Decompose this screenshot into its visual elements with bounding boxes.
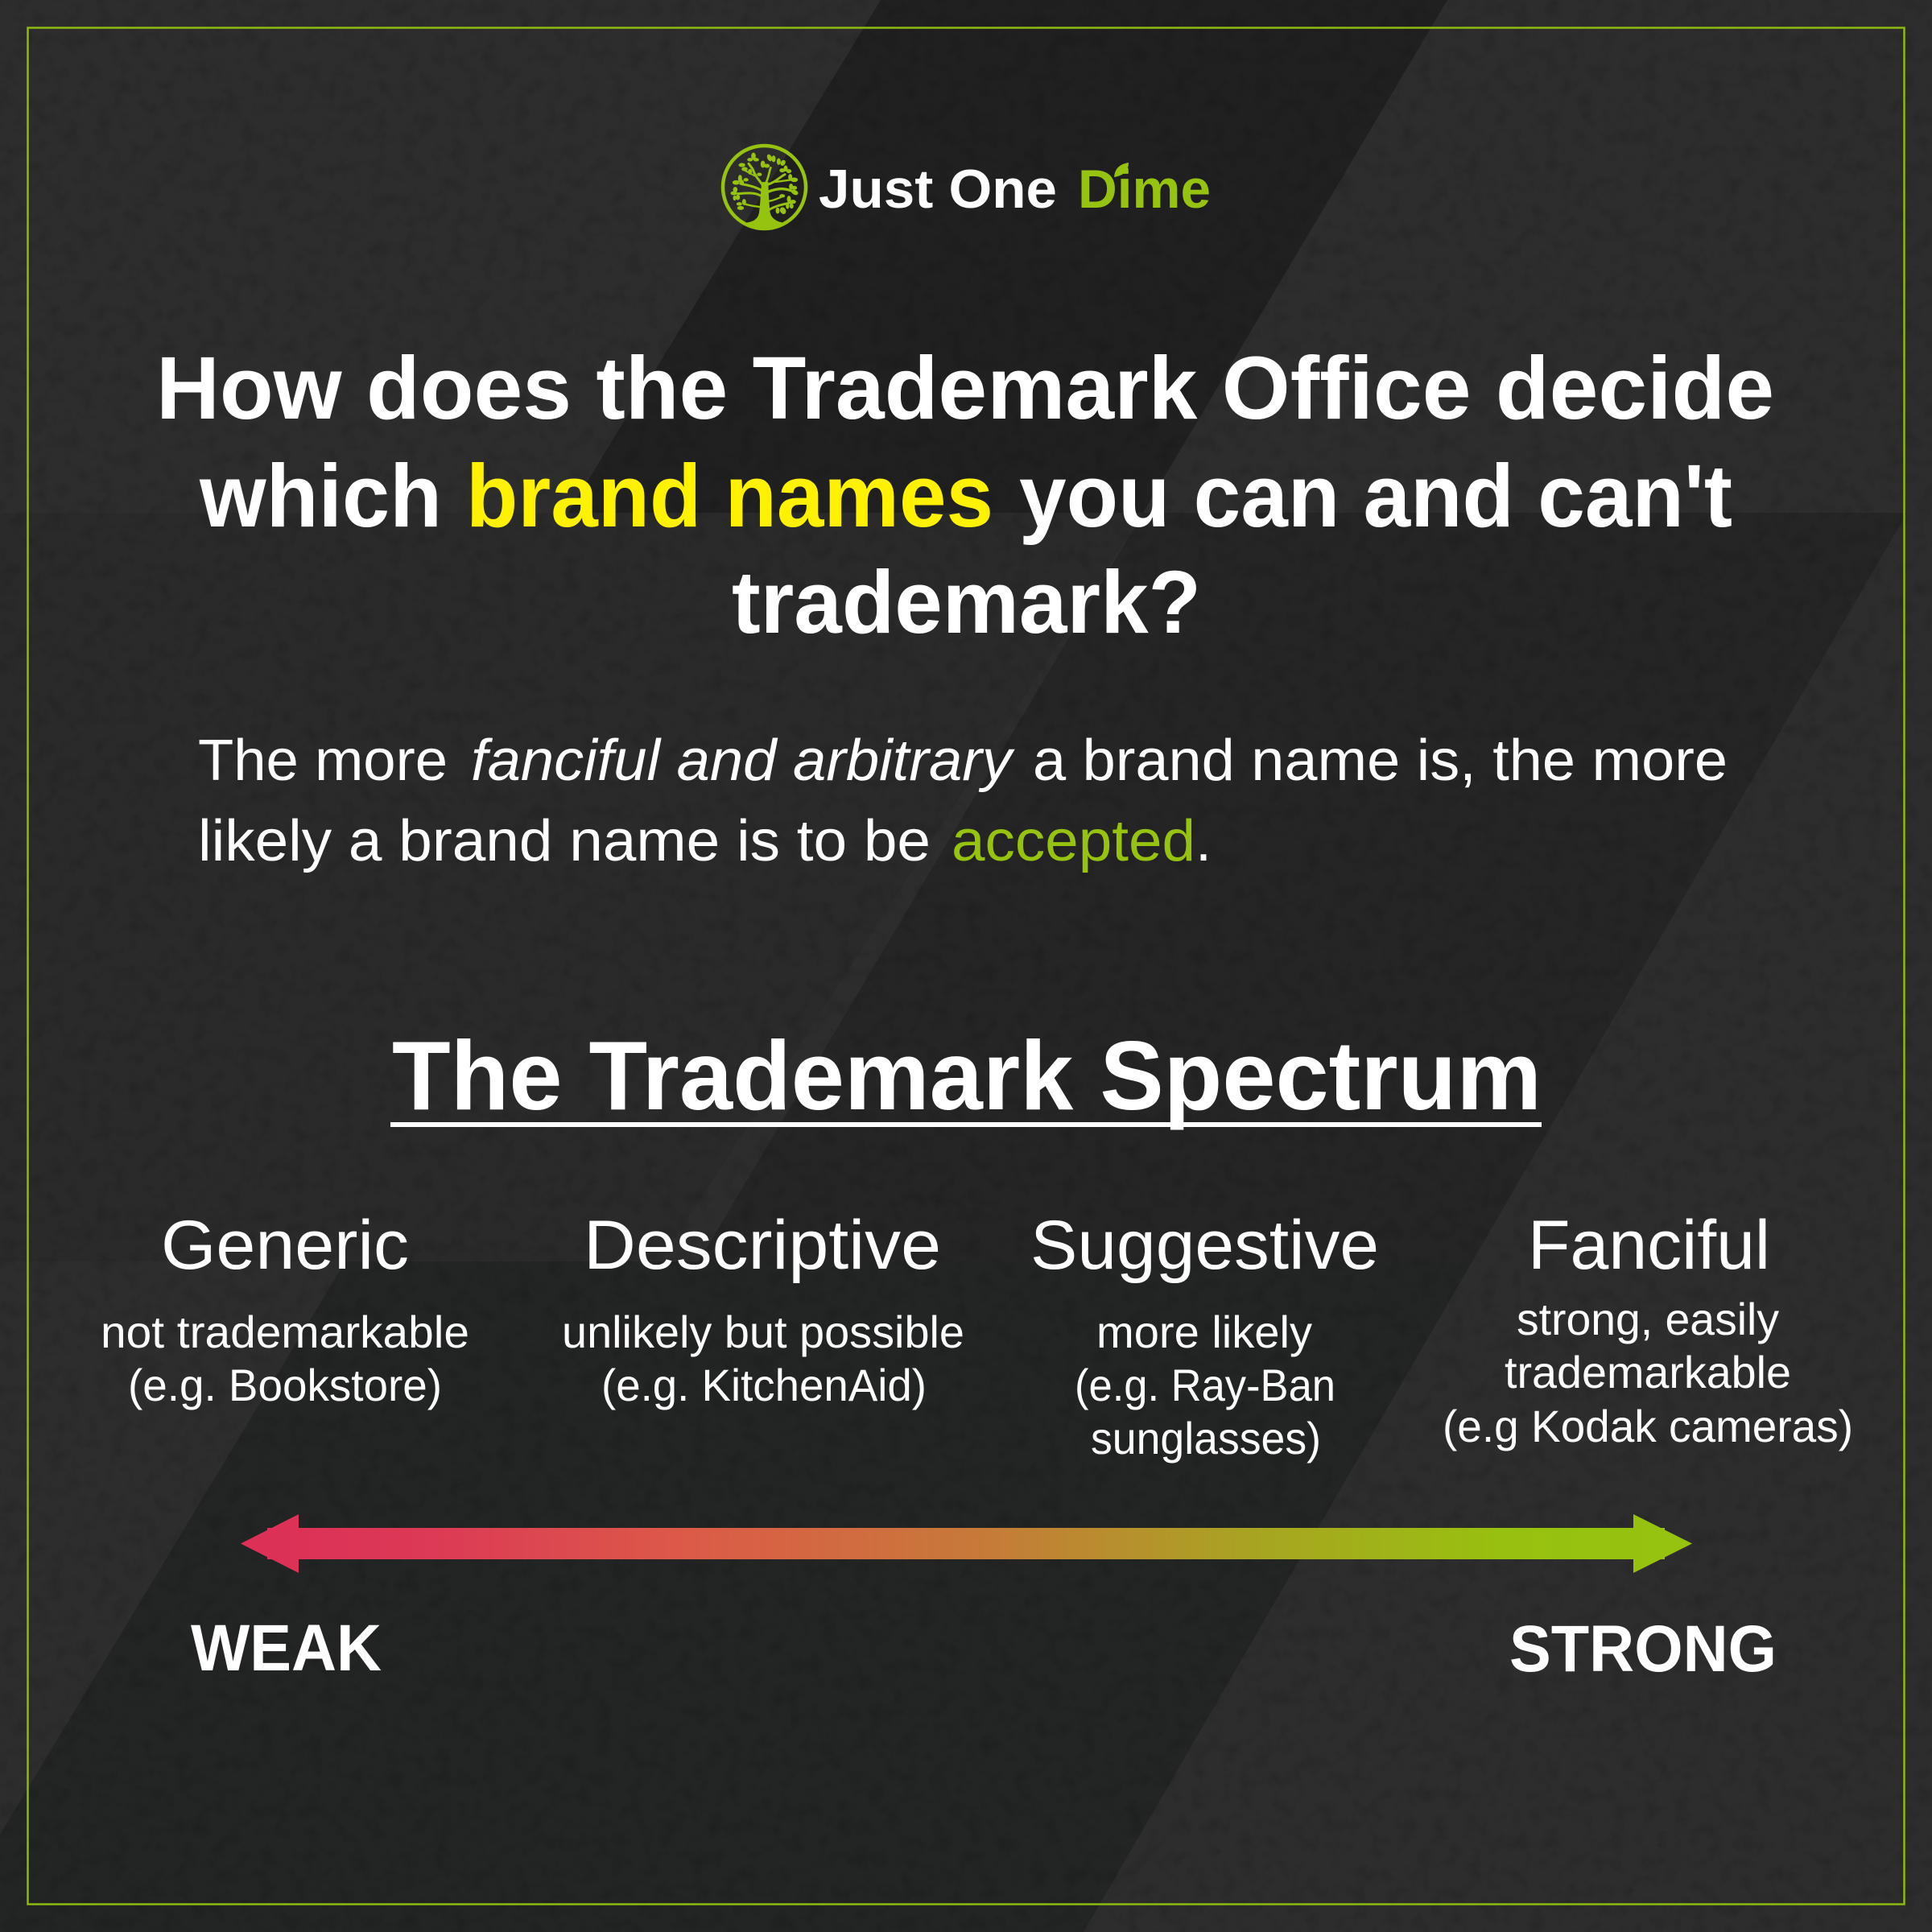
title: How does the Trademark Office decide — [156, 339, 1774, 438]
intro paragraph: The more — [198, 729, 448, 793]
column: suggestive — [1030, 1207, 1379, 1463]
column: fanciful — [1443, 1207, 1853, 1451]
wordmark — [819, 159, 1211, 220]
intro paragraph: accepted — [952, 809, 1195, 873]
column: fanciful: (e.g Kodak cameras) — [1443, 1401, 1853, 1451]
title: brand names — [466, 447, 993, 546]
logo — [723, 146, 1211, 229]
column: descriptive — [562, 1207, 964, 1410]
column: descriptive: (e.g. KitchenAid) — [601, 1360, 927, 1410]
column: generic — [101, 1207, 469, 1410]
title: you can and can't — [1019, 447, 1732, 546]
wordmark: Just One — [819, 159, 1057, 220]
column: suggestive: more likely — [1096, 1307, 1312, 1357]
label: strong: STRONG — [1509, 1612, 1777, 1686]
column: suggestive: sunglasses) — [1091, 1413, 1321, 1463]
column: fanciful: trademarkable — [1505, 1347, 1791, 1397]
title — [156, 339, 1774, 652]
column: descriptive: unlikely but possible — [562, 1307, 964, 1357]
column: descriptive: Descriptive — [584, 1207, 941, 1284]
title: trademark? — [732, 553, 1201, 652]
intro paragraph: likely a brand name is to be — [198, 809, 931, 873]
column: fanciful: Fanciful — [1528, 1207, 1770, 1284]
icon: tree — [723, 146, 806, 229]
column: suggestive: Suggestive — [1030, 1207, 1379, 1284]
spectrum heading: The Trademark Spectrum — [392, 1021, 1542, 1130]
column: fanciful: strong, easily — [1517, 1294, 1779, 1344]
column: suggestive: (e.g. Ray-Ban — [1075, 1360, 1335, 1410]
intro paragraph: a brand name is, the more — [1033, 729, 1728, 793]
intro paragraph: fanciful and arbitrary — [471, 729, 1015, 793]
title: which — [199, 447, 442, 546]
label: weak: WEAK — [191, 1612, 382, 1685]
arrow: weak to strong spectrum — [241, 1514, 1692, 1573]
intro paragraph: . — [1195, 809, 1212, 873]
column: generic: Generic — [161, 1207, 409, 1284]
column: generic: not trademarkable — [101, 1307, 469, 1357]
wordmark: Dime — [1078, 159, 1211, 220]
intro paragraph — [198, 729, 1728, 873]
column: generic: (e.g. Bookstore) — [128, 1360, 442, 1410]
